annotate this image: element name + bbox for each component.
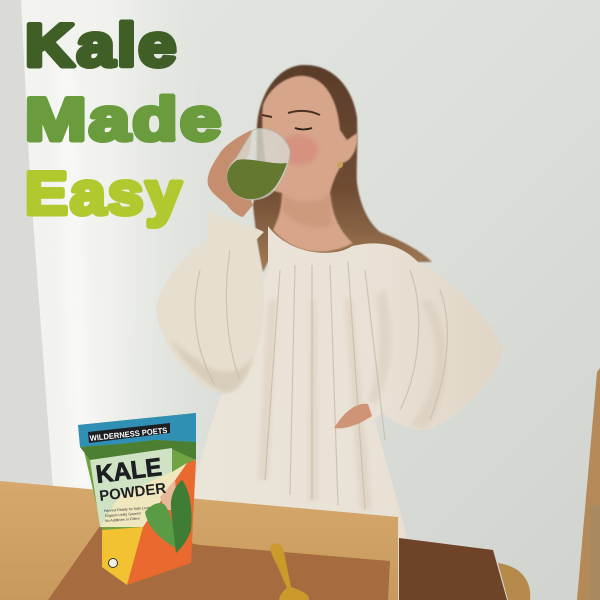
left sleeve [156, 210, 264, 393]
right edge wooden post [577, 368, 600, 600]
headline line: Kale: Kale [25, 12, 179, 79]
eyebrow [288, 111, 320, 115]
small copy: Harvest Ready for Kale Lovers [104, 506, 153, 513]
headline line: Easy: Easy [25, 161, 183, 228]
small copy: No Additives or Fillers [105, 517, 140, 523]
small copy [104, 506, 153, 523]
dress shading [258, 290, 446, 510]
small copy: Organic Leafy Greens! [105, 511, 141, 518]
dress folds [195, 250, 447, 510]
cream diagonal [100, 463, 187, 527]
cheek blush [278, 135, 318, 165]
orange panel [127, 460, 196, 585]
dress [190, 226, 504, 540]
pink patch [160, 480, 178, 510]
headline line: Made: Made [25, 86, 223, 153]
kale text: KALE [94, 453, 163, 489]
cutting board [48, 526, 390, 600]
sleeve shadow [170, 340, 255, 392]
glass of green juice [227, 128, 290, 200]
organic seal [108, 558, 118, 568]
hand on hip [334, 404, 372, 428]
chair arm [498, 563, 530, 600]
neck shadow [282, 193, 332, 228]
brand label: WILDERNESS POETS [89, 426, 168, 443]
label panel [90, 448, 172, 527]
earring [337, 162, 343, 168]
table [0, 481, 530, 600]
bag body [78, 413, 196, 585]
kale powder bag [78, 413, 196, 585]
powder text: POWDER [98, 480, 167, 505]
gold spoon [270, 543, 309, 600]
woman [156, 65, 504, 540]
kale leaf [145, 503, 176, 548]
wooden block [399, 538, 507, 600]
sky band [78, 413, 196, 447]
kale leaf right [171, 480, 192, 553]
hair [253, 65, 432, 272]
hills [80, 440, 196, 460]
yellow panel [102, 527, 143, 585]
face and neck [262, 76, 357, 252]
hand [208, 130, 253, 217]
closed eye [295, 128, 312, 130]
headline [25, 12, 223, 228]
